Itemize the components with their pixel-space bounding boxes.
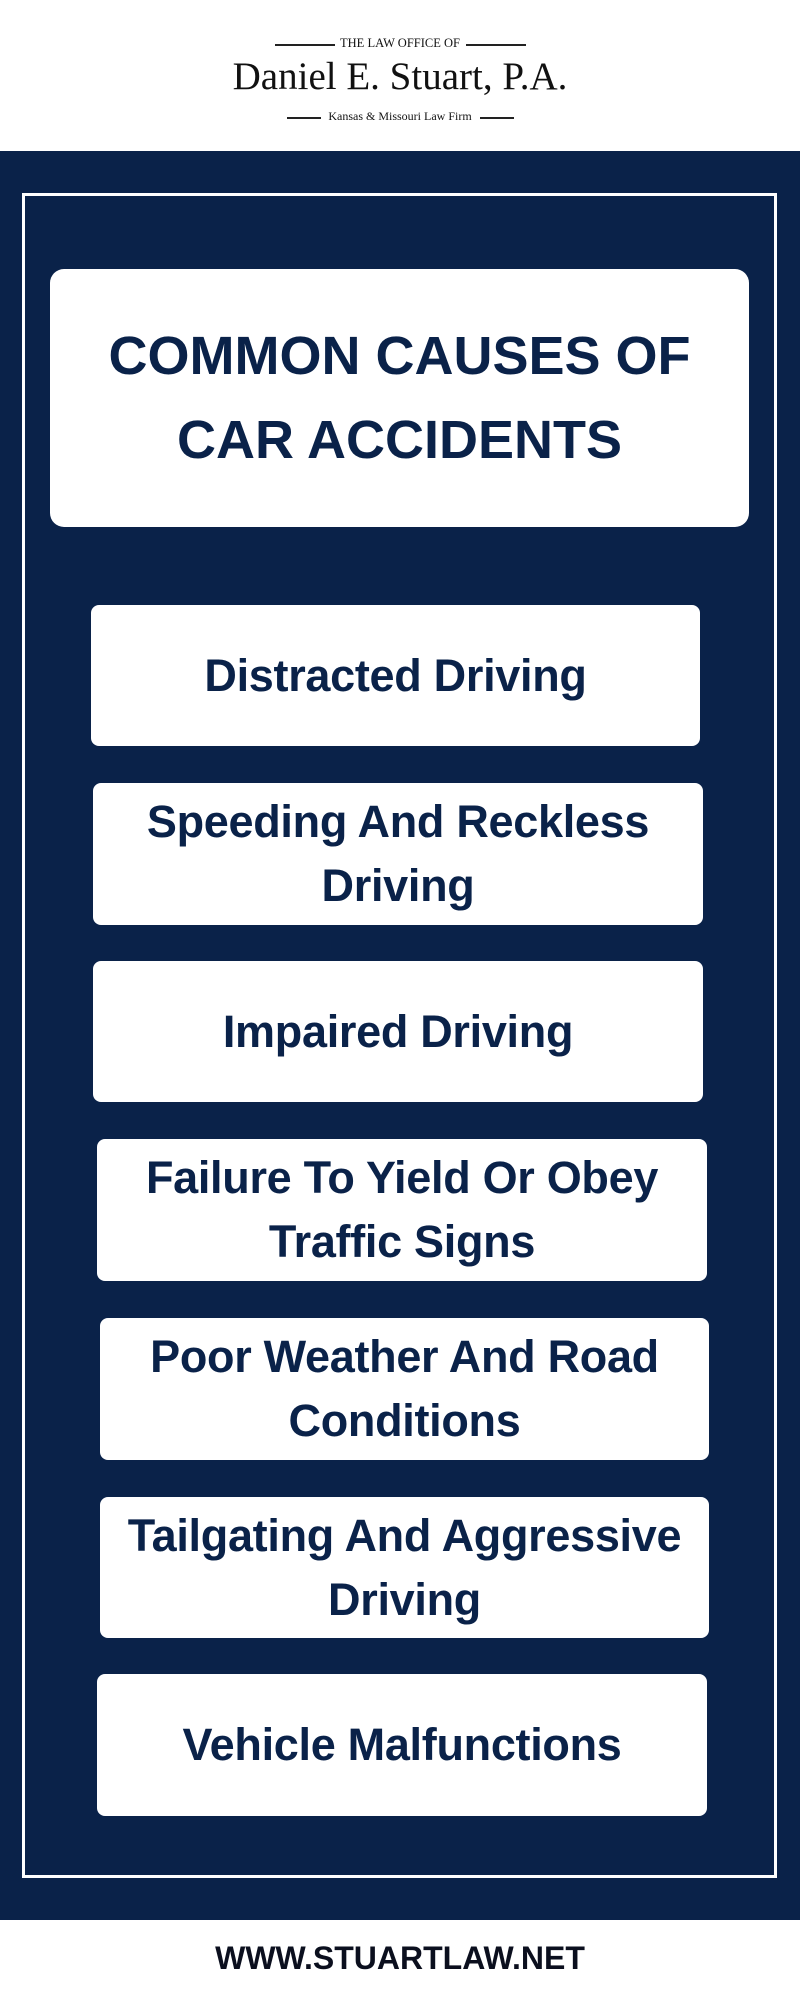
item: tailgating: Tailgating And Aggressive	[128, 1510, 681, 1560]
title box	[50, 269, 749, 527]
item: impaired: Impaired Driving	[223, 1006, 573, 1056]
item: impaired	[93, 961, 703, 1102]
item: distracted driving	[91, 605, 700, 746]
item: tailgating: Driving	[328, 1574, 481, 1624]
title box: CAR ACCIDENTS	[177, 410, 622, 470]
title box: COMMON CAUSES OF	[108, 326, 690, 386]
logo: Daniel E. Stuart, P.A.	[233, 55, 567, 98]
item: speeding	[93, 783, 703, 925]
footer url: WWW.STUARTLAW.NET	[215, 1940, 585, 1976]
item: speeding: Driving	[322, 860, 474, 911]
item: distracted driving: Distracted Driving	[204, 650, 587, 700]
item: tailgating	[100, 1497, 709, 1638]
item: poor weather: Poor Weather And Road	[150, 1331, 659, 1382]
item: speeding: Speeding And Reckless	[147, 796, 649, 847]
logo: THE LAW OFFICE OF	[340, 36, 460, 50]
item: poor weather	[100, 1318, 709, 1460]
logo: Kansas & Missouri Law Firm	[328, 109, 472, 123]
frame border	[22, 193, 777, 1878]
item: poor weather: Conditions	[289, 1395, 520, 1446]
item: failure to yield: Traffic Signs	[269, 1216, 535, 1267]
item: failure to yield: Failure To Yield Or Obey	[146, 1152, 658, 1203]
item: vehicle malfunctions: Vehicle Malfunctions	[182, 1719, 622, 1770]
item: vehicle malfunctions	[97, 1674, 707, 1816]
logo	[233, 36, 567, 123]
item: failure to yield	[97, 1139, 707, 1281]
